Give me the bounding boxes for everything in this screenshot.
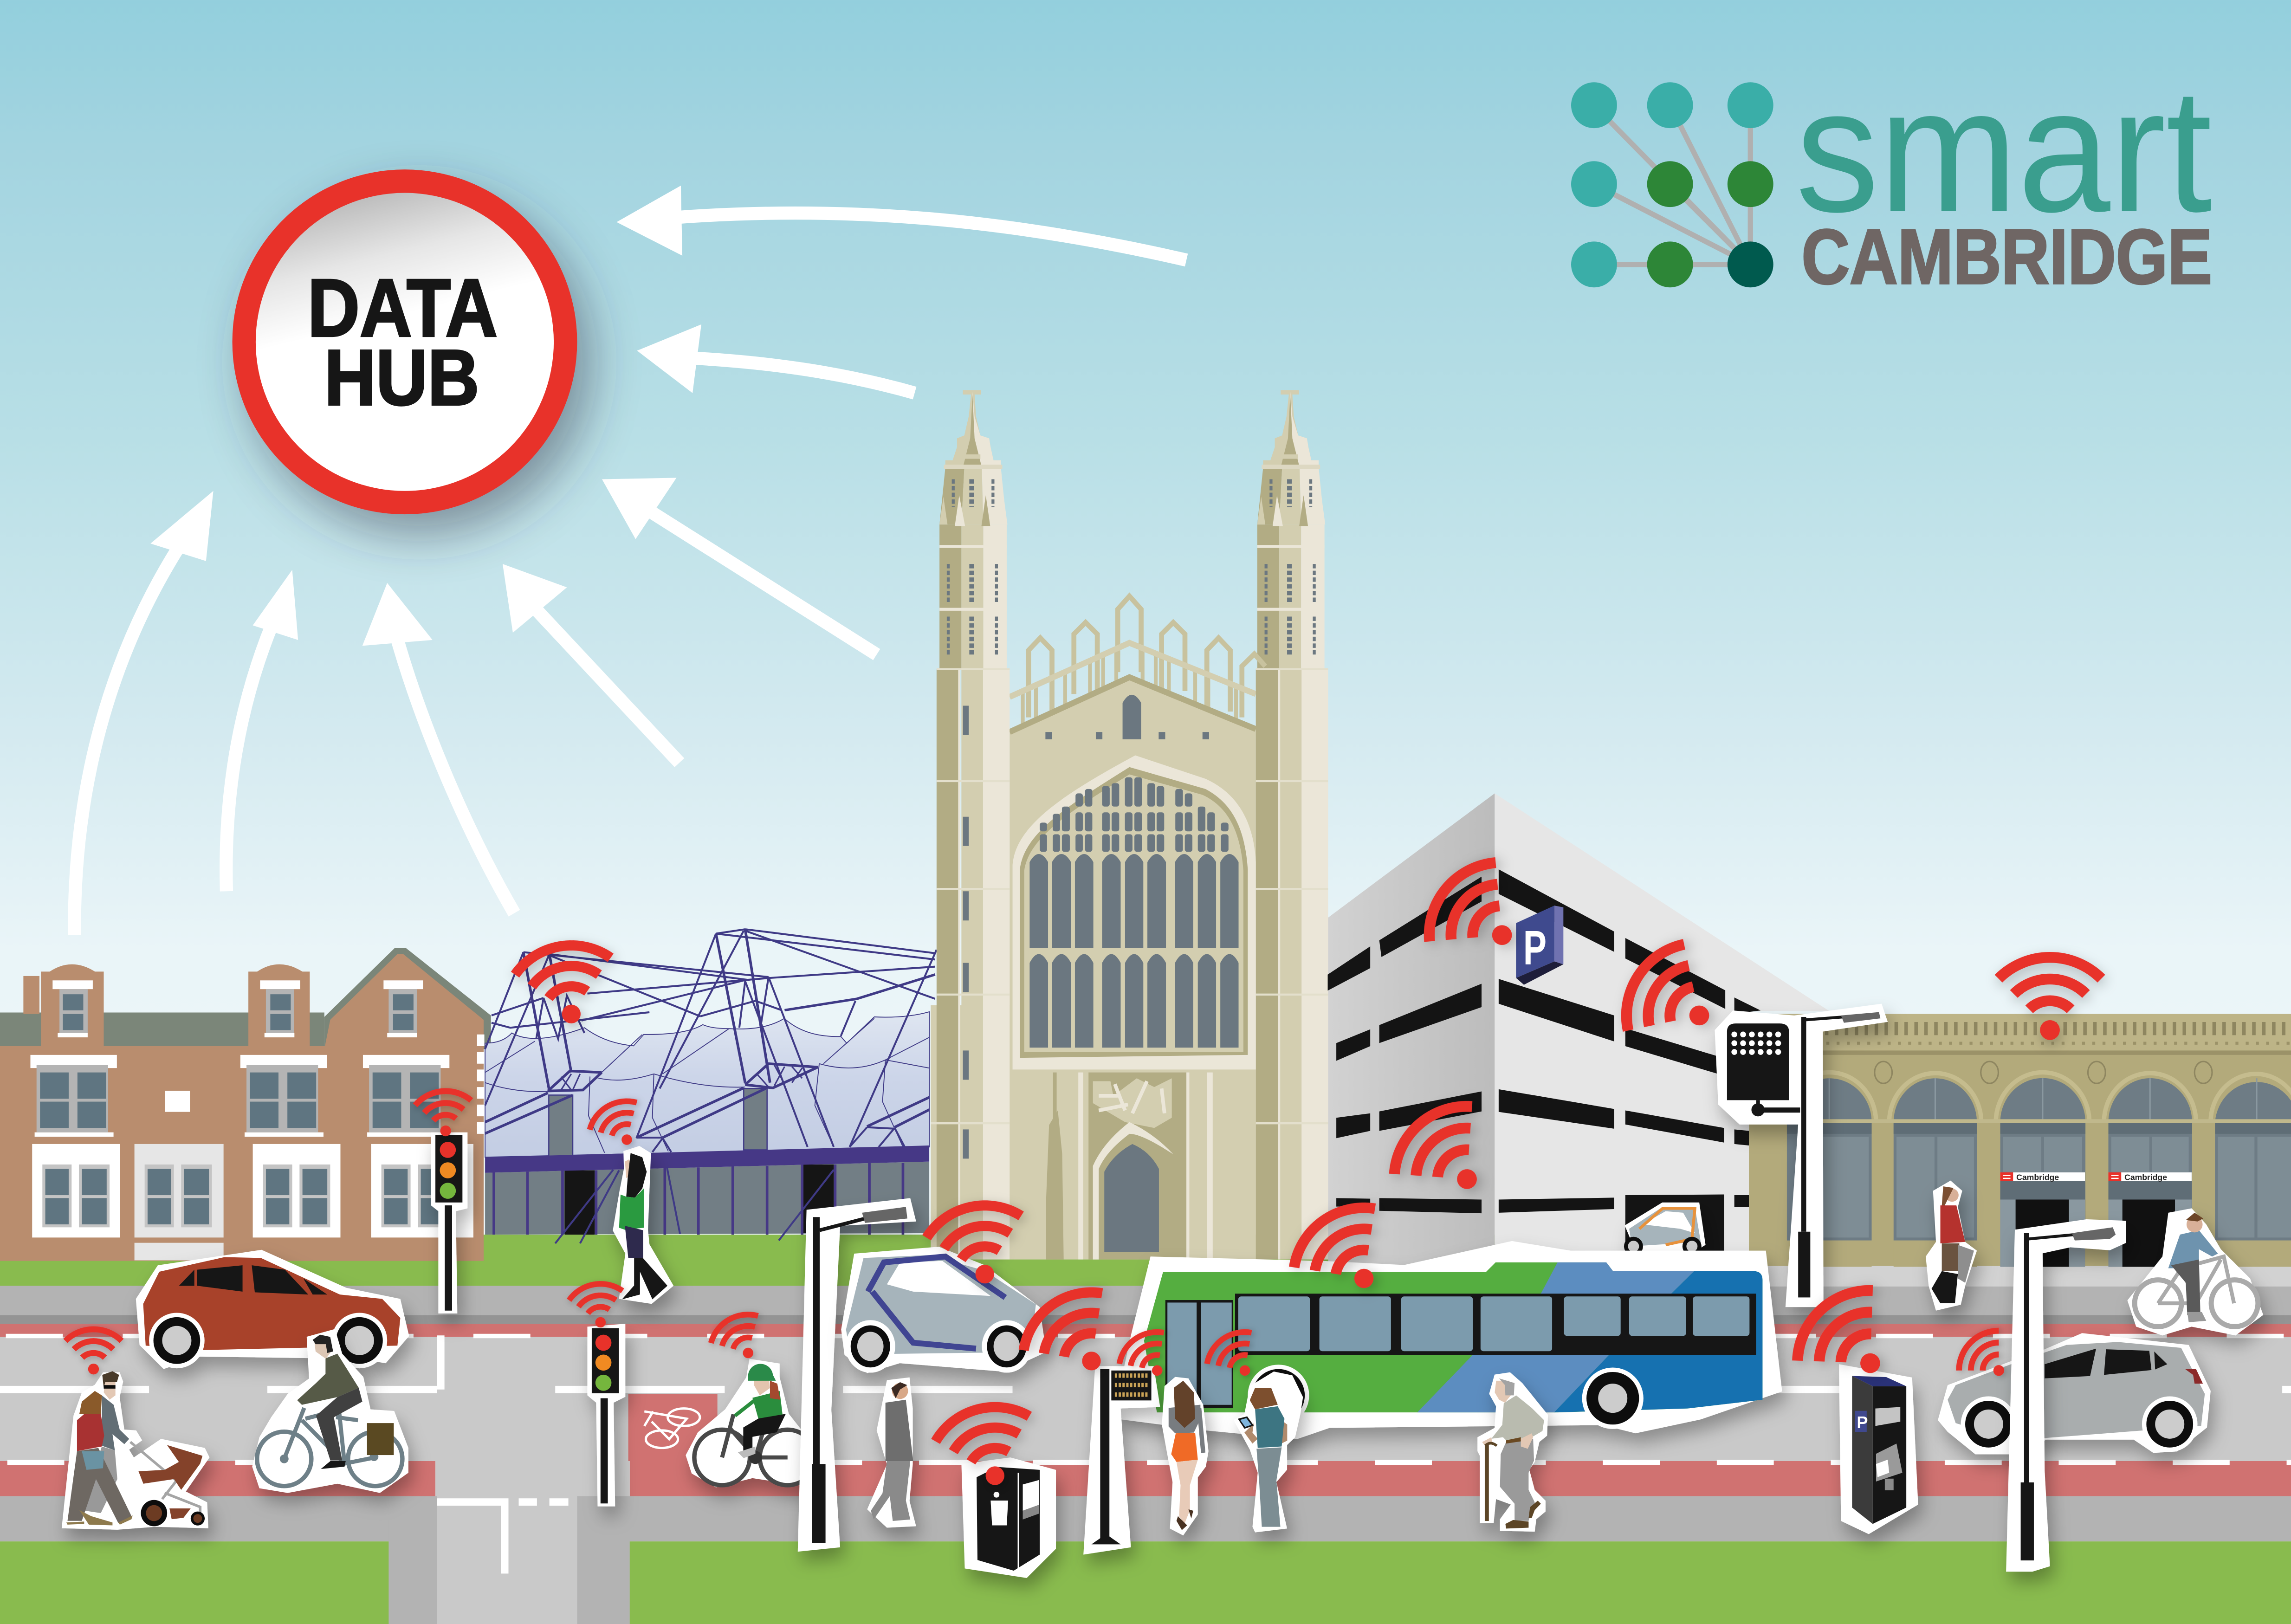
chapel carved portal [1046,1073,1213,1260]
wifi: woman in green [584,1093,653,1158]
wifi: bin [931,1397,1044,1497]
wifi: stadium [511,938,621,1032]
data hub circle [233,169,577,514]
data arrow 1 [616,186,1186,260]
lamp post with info panel [1715,1004,1888,1307]
smart parking meter: P [1857,1413,1868,1432]
chapel left tower [931,669,1010,1260]
data hub label: DATA [308,262,498,354]
station name signs: Cambridge [2124,1172,2167,1182]
person: older man with cane [1477,1372,1548,1532]
building: red-brick houses [0,948,491,1261]
pavement and road surfaces [0,1286,2291,1624]
small electric car in car park [1624,1203,1706,1256]
data arrow 7 [74,491,214,935]
wifi: traffic light two [567,1280,628,1332]
person: cyclist on grey bicycle [2127,1208,2263,1335]
wifi: car park lower [1380,1091,1512,1220]
bus stop display sign [1083,1366,1160,1554]
bus [1118,1241,1782,1439]
lamp post right [2006,1219,2126,1572]
ground-floor bay windows [32,1144,473,1260]
person: woman in green walking [613,1146,673,1304]
grey hatchback car [1938,1333,2211,1455]
person: woman in orange skirt [1162,1377,1209,1535]
data arrow 2 [637,324,915,393]
wifi: grey car [1951,1322,2023,1394]
chapel great west window [1013,756,1256,1069]
person: cyclist with bag [252,1329,408,1493]
building: King's College Chapel [931,390,1337,1260]
wifi: station [1999,958,2101,1040]
person: woman with tablet [1234,1372,1303,1533]
station name signs: Cambridge [2016,1172,2059,1182]
wifi: bus stop left [1012,1277,1136,1397]
station arched windows [1743,1061,2291,1241]
chapel parapet [1010,596,1265,731]
smart electric car [841,1247,1046,1373]
data arrow 5 [362,583,514,913]
data hub label [308,262,498,422]
logo network icon [1571,82,1773,287]
data arrow 3 [602,478,877,654]
smart bin [961,1457,1056,1578]
stadium lower wall [485,1088,929,1235]
first-floor windows [30,1055,449,1137]
car park P sign: P [1523,921,1547,975]
wifi: woman with tablet [1201,1323,1270,1391]
chapel central wall [1010,677,1256,1260]
logo wordmark smart: smart [1796,51,2213,249]
sky background [0,0,2291,1286]
station name signs [2000,1172,2192,1182]
stadium mast framework [485,929,937,1243]
grass strip behind the road [0,1235,2291,1287]
wifi: display sign [1113,1323,1183,1391]
person: man in grey [867,1378,916,1528]
wifi: traffic light one [414,1089,474,1139]
smart parking meter [1839,1364,1918,1534]
smart Cambridge logo [1571,51,2213,300]
data hub label: HUB [324,334,479,422]
stadium membrane roof [485,1012,929,1157]
wifi: car park upper left [1413,849,1543,981]
wifi: car park upper right [1610,933,1735,1064]
lamp post left [798,1198,916,1552]
wifi: couple [65,1329,122,1374]
wifi: cyclist in green [705,1306,774,1371]
station entrances [1816,1181,2291,1267]
people: couple with pushchair [62,1371,209,1530]
chapel right tower [1256,669,1337,1260]
person: cyclist in green [686,1359,815,1488]
cycle lane bicycle symbol [644,1409,700,1448]
wifi: bus top [1282,1192,1410,1316]
wifi: smart car [922,1197,1034,1294]
building: multi-storey car park [1328,793,1829,1286]
traffic light two [587,1324,625,1507]
traffic light one [431,1132,467,1313]
building: Cambridge railway station [1743,1014,2291,1287]
data arrow 4 [503,564,680,763]
car park P sign [1516,906,1563,985]
wifi: parking meter [1783,1275,1915,1405]
road markings [0,1335,2291,1573]
car park parking slots [1328,869,1760,1252]
building: tensile-roof stadium [485,929,937,1243]
chapel tower lanterns [939,390,1325,669]
logo wordmark Cambridge: CAMBRIDGE [1801,214,2212,300]
red car [136,1250,409,1369]
person: woman in red with bag [1926,1181,1977,1311]
data arrow 6 [226,570,298,891]
stadium thin roof cables [485,1018,929,1153]
